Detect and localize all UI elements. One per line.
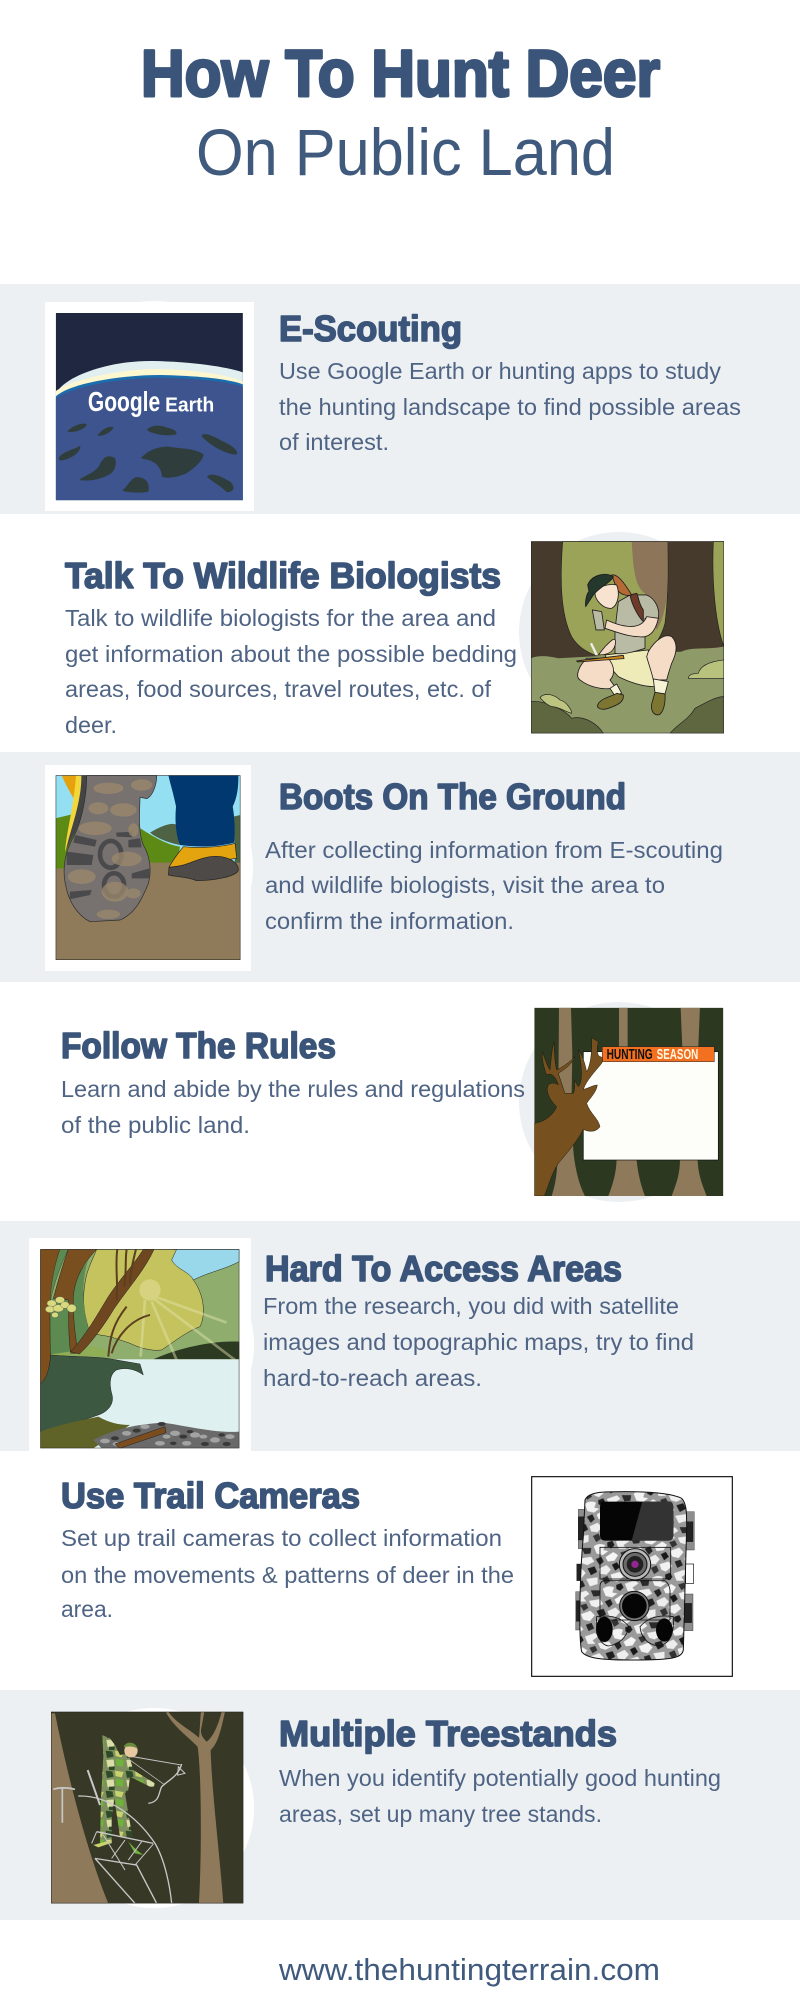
illustration: Google Earth: Earth <box>165 395 214 417</box>
heading: Use Trail Cameras: Use Trail Cameras <box>61 1475 360 1516</box>
panel: Hard To Access Areas <box>0 1221 800 1451</box>
illustration: deer and hunting season sign <box>534 1008 724 1196</box>
panel: Multiple Treestands <box>0 1690 800 1920</box>
heading: Boots On The Ground: Boots On The Ground <box>279 776 626 817</box>
text: Multiple Treestands body: When you identify potentially good hunting <box>279 1765 721 1791</box>
illustration: hunter in tree stand <box>51 1712 244 1904</box>
text: Multiple Treestands body: areas, set up many tree stands. <box>279 1801 602 1827</box>
heading: Follow The Rules: Follow The Rules <box>61 1025 336 1066</box>
panel: Talk To Wildlife Biologists <box>65 532 724 738</box>
illustration: biologist with compass <box>531 541 724 734</box>
text: Use Trail Cameras body: Set up trail cameras to collect information <box>61 1525 502 1551</box>
heading: Hard To Access Areas: Hard To Access Areas <box>265 1248 622 1289</box>
text: Multiple Treestands body <box>279 1765 721 1827</box>
text: Follow The Rules body: of the public land. <box>61 1112 250 1138</box>
text: Hard To Access Areas body: hard-to-reach areas. <box>263 1365 482 1391</box>
text: E-Scouting body: of interest. <box>279 429 389 455</box>
illustration: deer and hunting season sign: SEASON <box>657 1047 698 1063</box>
text: Talk To Wildlife Biologists body: deer. <box>65 712 117 738</box>
illustration: deer and hunting season sign: HUNTING <box>607 1047 653 1063</box>
illustration: Google Earth: Google <box>88 386 160 417</box>
heading: E-Scouting: E-Scouting <box>279 308 462 349</box>
title: How To Hunt Deer <box>141 36 660 110</box>
text: E-Scouting body: the hunting landscape to find possible areas <box>279 394 741 420</box>
heading: Talk To Wildlife Biologists: Talk To Wildlife Biologists <box>65 555 501 596</box>
text: Talk To Wildlife Biologists body: areas, food sources, travel routes, etc. of <box>65 676 492 702</box>
text: Boots On The Ground body: and wildlife biologists, visit the area to <box>265 872 665 898</box>
text: Use Trail Cameras body: area. <box>61 1596 113 1622</box>
title <box>141 36 660 189</box>
text: Talk To Wildlife Biologists body: get information about the possible bedding <box>65 641 517 667</box>
text: Hard To Access Areas body <box>263 1293 694 1391</box>
text: Hard To Access Areas body: From the research, you did with satellite <box>263 1293 679 1319</box>
text: Boots On The Ground body <box>265 837 723 934</box>
heading: Multiple Treestands: Multiple Treestands <box>279 1713 617 1754</box>
panel: Use Trail Cameras <box>61 1475 732 1676</box>
text: Hard To Access Areas body: images and topographic maps, try to find <box>263 1329 694 1355</box>
illustration: trail camera <box>531 1476 733 1677</box>
text: Boots On The Ground body: confirm the information. <box>265 908 514 934</box>
text: Use Trail Cameras body <box>61 1525 514 1622</box>
text: E-Scouting body <box>279 358 741 455</box>
text: Talk To Wildlife Biologists body: Talk to wildlife biologists for the area and <box>65 605 496 631</box>
panel: Follow The Rules <box>61 1002 723 1202</box>
text: Talk To Wildlife Biologists body <box>65 605 517 738</box>
text: E-Scouting body: Use Google Earth or hunting apps to study <box>279 358 721 384</box>
panel: Boots On The Ground <box>0 752 800 982</box>
title: On Public Land <box>196 115 615 189</box>
text: Follow The Rules body <box>61 1076 525 1138</box>
illustration: Google Earth <box>56 313 243 500</box>
illustration: lake and forest <box>40 1249 240 1448</box>
text: Follow The Rules body: Learn and abide by the rules and regulations <box>61 1076 525 1102</box>
text: Use Trail Cameras body: on the movements & patterns of deer in the <box>61 1562 514 1588</box>
text: Boots On The Ground body: After collecting information from E-scouting <box>265 837 723 863</box>
illustration: hiking boots <box>56 775 240 960</box>
panel: E-Scouting <box>0 284 800 514</box>
footer: website URL: www.thehuntingterrain.com <box>278 1952 660 1987</box>
